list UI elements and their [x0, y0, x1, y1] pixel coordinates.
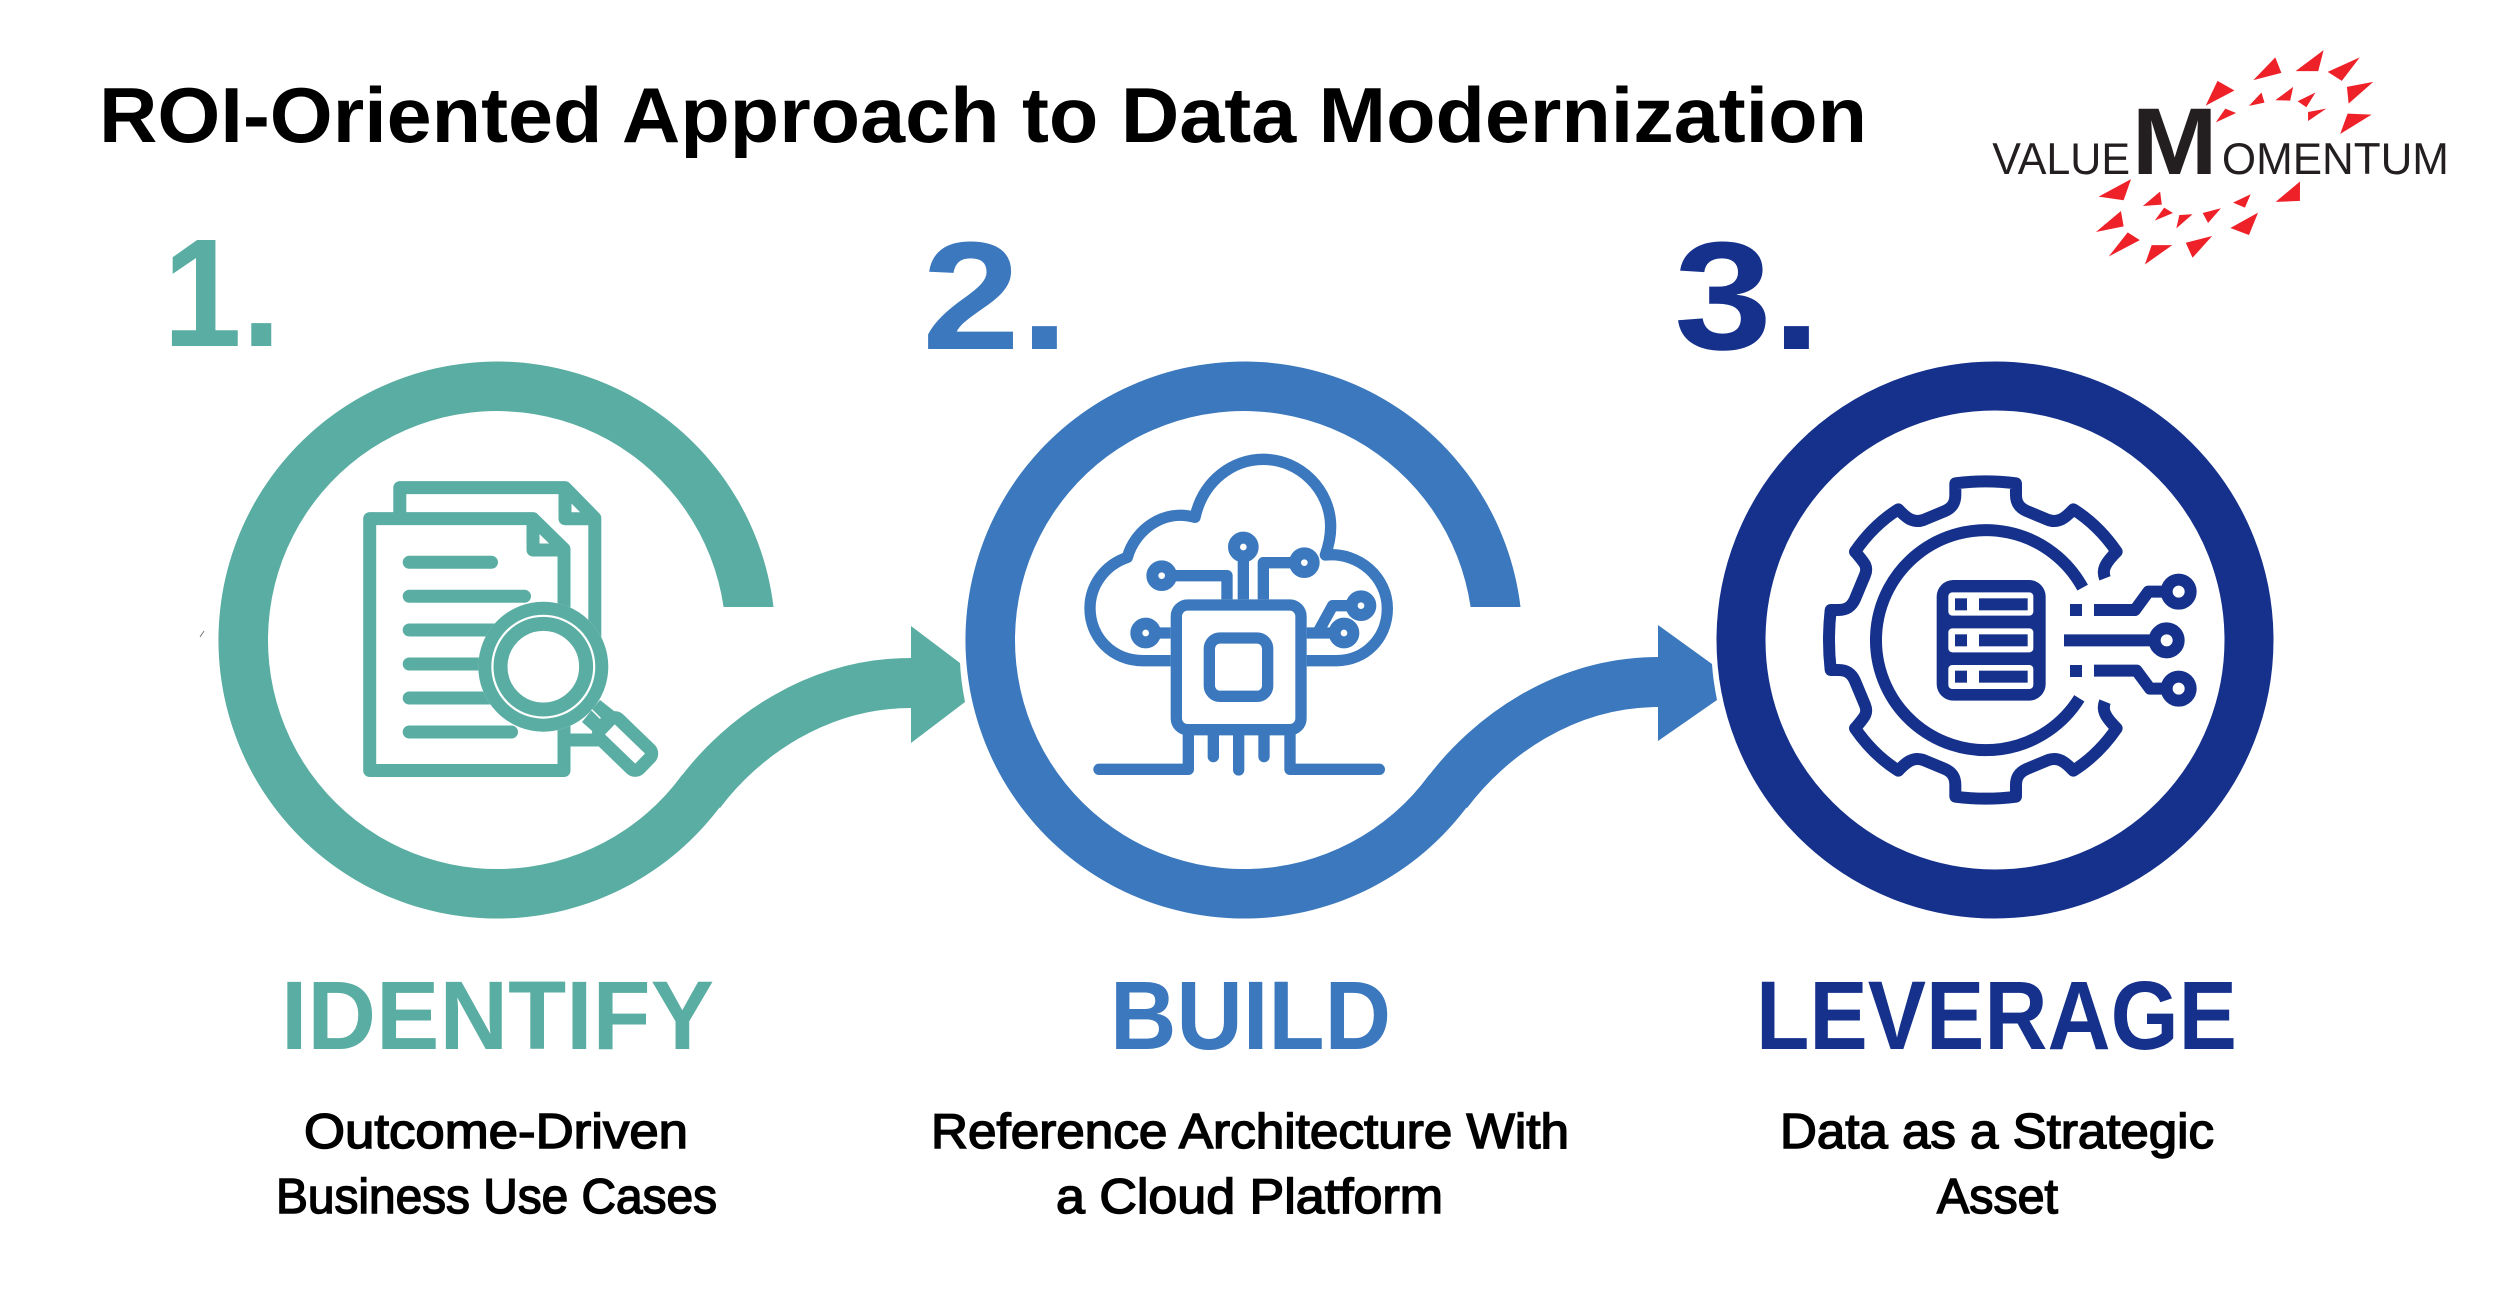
ring 3: [1741, 386, 2249, 894]
heading leverage: LEVERAGE: [1756, 961, 2237, 1070]
panel: step 2 build: [922, 210, 1717, 1224]
ring with arrow 1: [218, 362, 965, 919]
heading identify: IDENTIFY: [281, 961, 714, 1070]
description build: [931, 1105, 1569, 1224]
description leverage: [1780, 1105, 2214, 1224]
logo wordmark: [1992, 90, 2449, 195]
description leverage: Asset: [1937, 1170, 2058, 1224]
description identify: Outcome-Driven: [304, 1105, 688, 1159]
panel: step 1 identify: [163, 207, 965, 1224]
logo wordmark: M: [2132, 90, 2218, 195]
logo wordmark: VALUE: [1992, 135, 2130, 184]
ring with arrow 2: [965, 362, 1717, 919]
description identify: [276, 1105, 717, 1224]
logo red shards: [2096, 50, 2373, 264]
number 3: 3.: [1674, 210, 1821, 382]
description build: a Cloud Platform: [1056, 1170, 1443, 1224]
title: ROI-Oriented Approach to Data Modernization: [99, 71, 1867, 159]
description build: Reference Architecture With: [931, 1105, 1569, 1159]
description leverage: Data as a Strategic: [1780, 1105, 2214, 1159]
icon: cloud with chip: [1090, 459, 1387, 770]
icon: documents with magnifier: [370, 488, 654, 773]
icon: gear with servers: [1829, 481, 2191, 799]
logo: ValueMomentum: [1992, 50, 2449, 264]
panel: step 3 leverage: [1674, 210, 2249, 1224]
logo wordmark: OMENTUM: [2222, 135, 2449, 184]
number 2: 2.: [922, 210, 1069, 382]
number 1: 1.: [163, 207, 281, 379]
description identify: Business Use Cases: [276, 1170, 717, 1224]
heading build: BUILD: [1110, 961, 1391, 1070]
